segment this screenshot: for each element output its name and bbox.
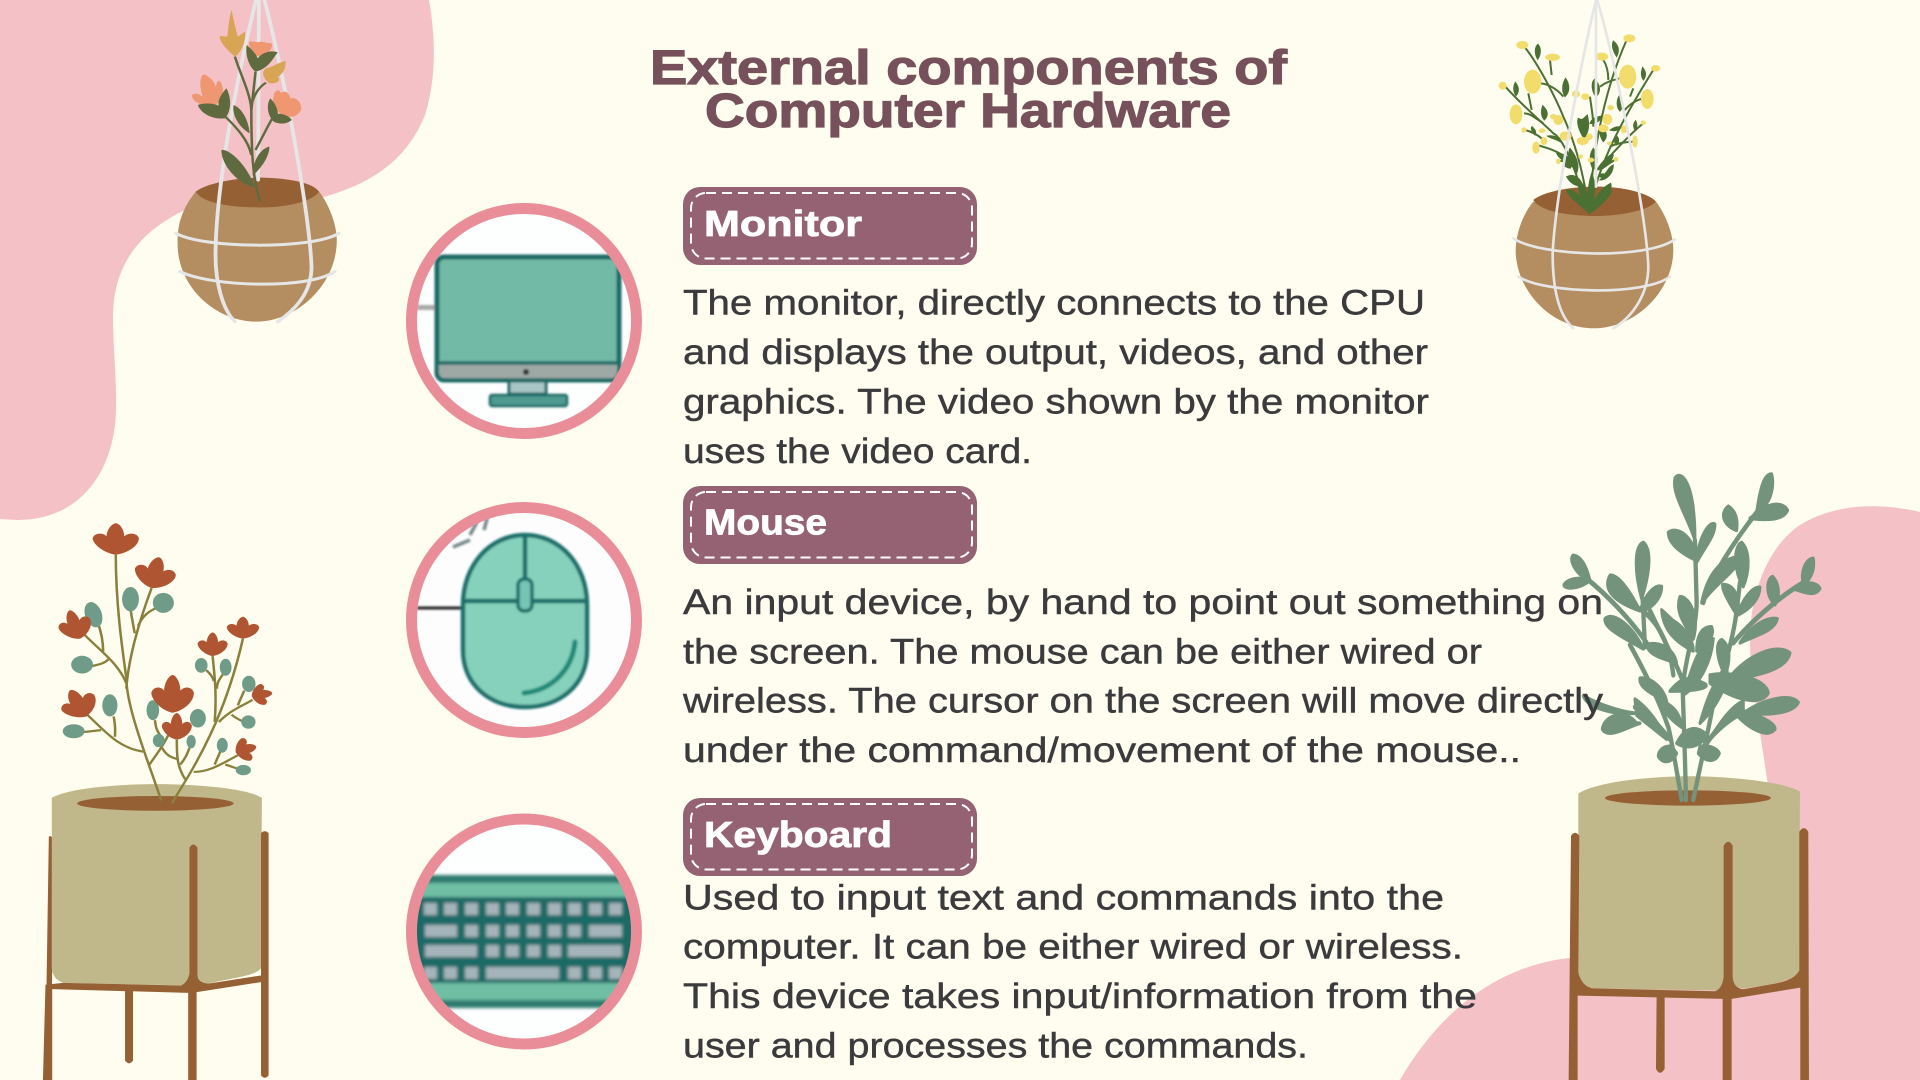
title [650, 42, 1288, 138]
text block: keyboard description: This device takes input/information from the [683, 976, 1477, 1016]
icon: mouse [411, 507, 637, 733]
icon: keyboard [405, 818, 645, 1044]
background blob: bottom right [1400, 506, 1920, 1080]
text block: monitor description [683, 282, 1429, 471]
hanging plant: top left [176, 0, 339, 322]
text block: keyboard description: user and processes the commands. [683, 1026, 1308, 1066]
heading badge: Monitor: Monitor [704, 203, 862, 244]
text block: monitor description: The monitor, directly connects to the CPU [683, 282, 1425, 322]
text block: monitor description: and displays the output, videos, and other [683, 332, 1428, 372]
heading badge: Keyboard [683, 798, 977, 876]
heading badge: Monitor [683, 187, 977, 265]
heading badge: Mouse: Mouse [704, 502, 827, 542]
hanging plant: top right [1499, 0, 1675, 328]
potted plant: bottom right [1564, 474, 1820, 1080]
text block: mouse description [682, 582, 1603, 770]
potted plant: bottom left [43, 523, 274, 1080]
title: External components of [650, 42, 1288, 95]
icon: monitor [411, 208, 637, 434]
text block: keyboard description [683, 878, 1477, 1066]
text block: monitor description: graphics. The video shown by the monitor [683, 382, 1429, 422]
text block: mouse description: wireless. The cursor on the screen will move directly [682, 680, 1603, 720]
background blob: top left [0, 0, 434, 520]
text block: keyboard description: Used to input text and commands into the [683, 878, 1444, 918]
text block: monitor description: uses the video card. [683, 431, 1032, 471]
text block: mouse description: An input device, by hand to point out something on [683, 582, 1603, 622]
heading badge: Keyboard: Keyboard [704, 814, 892, 855]
text block: keyboard description: computer. It can be either wired or wireless. [683, 926, 1463, 966]
title: Computer Hardware [705, 85, 1231, 138]
heading badge: Mouse [683, 486, 977, 564]
text block: mouse description: the screen. The mouse can be either wired or [683, 632, 1482, 672]
text block: mouse description: under the command/movement of the mouse.. [683, 730, 1521, 770]
